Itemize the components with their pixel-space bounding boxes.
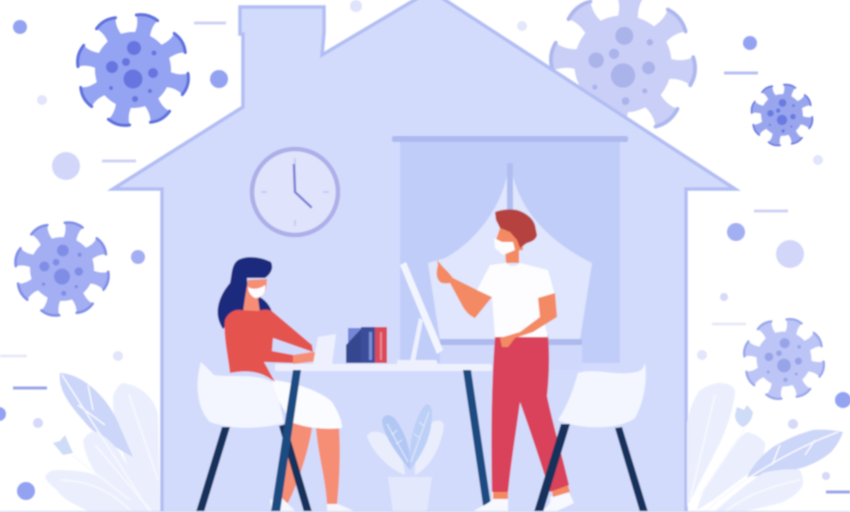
foliage: bottom right [687,383,843,512]
virus: top left [76,13,190,127]
woman: face and neck [243,279,267,312]
foliage: bottom left [45,373,160,512]
chair: left seat [198,362,284,428]
window with curtains [392,136,628,370]
man standing [437,209,574,512]
virus: right lower [743,318,825,400]
man: neck [505,248,519,263]
virus: right small [750,83,814,147]
woman: sweater [225,310,313,382]
woman: back leg [275,420,312,503]
man: resting arm [500,293,557,347]
desktop monitor [397,262,443,365]
desk [275,364,492,512]
woman: skirt [272,380,342,429]
woman: shoes [270,496,356,512]
man: pointing arm [437,260,492,318]
man: shoes [472,490,574,512]
man: face mask [494,238,515,255]
man: hair [495,209,537,248]
virus: left middle [14,221,110,317]
chair: right chair [534,363,648,512]
virus: top right [539,0,707,148]
woman: front leg [316,428,340,505]
man: ankles [493,482,570,499]
man: face [496,224,523,252]
potted plant [367,404,444,511]
laptop [313,334,336,364]
woman at desk [198,257,356,512]
woman: hands [293,352,319,364]
house silhouette [113,0,735,512]
books [346,327,387,363]
wall clock [252,149,338,235]
man: trousers [491,335,569,492]
chair legs: left chair [196,424,312,512]
woman: hair [218,257,272,329]
woman: face mask [248,285,265,298]
man: shirt [477,263,555,337]
